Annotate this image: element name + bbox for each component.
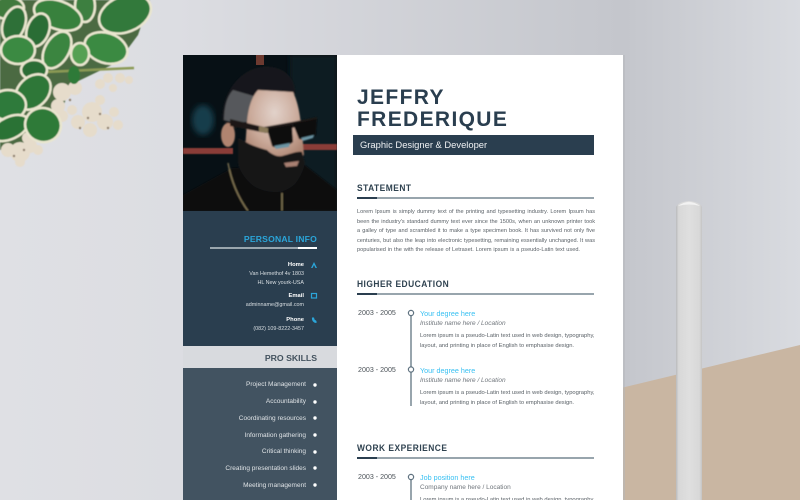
tan paper surface bbox=[600, 345, 800, 500]
statement text: Lorem Ipsum is simply dummy text of the printing and typesetting industry. Lorem Ipsum has bbox=[357, 209, 595, 215]
contact: home: HL New yourk-USA bbox=[257, 280, 304, 286]
name: JEFFRY bbox=[357, 86, 445, 109]
contact: email: Email bbox=[289, 293, 304, 299]
resume paper bbox=[183, 55, 623, 500]
education item 1: Lorem ipsum is a pseudo-Latin text used in web design, typography, bbox=[420, 332, 595, 338]
job title: Graphic Designer & Developer bbox=[360, 139, 487, 150]
skills list: Project Management bbox=[246, 381, 306, 388]
work item bbox=[358, 474, 595, 500]
contact: home: Home bbox=[288, 262, 304, 268]
contact: phone: (082) 109-8222-3457 bbox=[253, 326, 304, 332]
skills list: Critical thinking bbox=[262, 448, 306, 455]
education item 2: Institute name here / Location bbox=[420, 377, 506, 384]
beard bbox=[238, 138, 305, 192]
portrait photo bbox=[183, 55, 337, 211]
contact: email bbox=[246, 293, 304, 308]
plant bbox=[0, 0, 157, 167]
pro skills band bbox=[183, 346, 337, 368]
skills list: Creating presentation slides bbox=[225, 464, 306, 472]
heading: personal info: PERSONAL INFO bbox=[244, 234, 317, 244]
heading: work experience: WORK EXPERIENCE bbox=[357, 443, 447, 454]
education item 2: layout, and printing in place of English to emphasise design. bbox=[420, 400, 574, 406]
heading: pro skills: PRO SKILLS bbox=[265, 352, 317, 362]
leaves bbox=[0, 0, 157, 147]
statement text: popularised in the with the release of Letraset. Lorem ipsum is a pseudo-Latin text used. bbox=[357, 247, 580, 253]
skills list bbox=[225, 381, 317, 488]
personal info panel bbox=[183, 211, 337, 346]
flower clusters bbox=[1, 73, 133, 167]
education rule bbox=[357, 293, 594, 295]
ear bbox=[221, 123, 235, 147]
education item 2: Your degree here bbox=[420, 366, 475, 375]
statement text: a galley of type and scrambled it to make a type specimen book. It has survived not only five bbox=[357, 228, 595, 234]
contact: home bbox=[249, 262, 304, 286]
header band bbox=[353, 135, 594, 155]
education item 2 bbox=[358, 366, 595, 406]
statement text: centuries, but also the leap into electronic typesetting, remaining essentially unchanged. It was bbox=[357, 238, 595, 244]
education item 1: 2003 - 2005 bbox=[358, 309, 396, 317]
pencil bbox=[676, 201, 702, 500]
heading: higher education: HIGHER EDUCATION bbox=[357, 279, 449, 290]
contact: home: Van Hemethof 4v 1803 bbox=[249, 271, 304, 277]
shoulders bbox=[183, 165, 337, 211]
skills list: Information gathering bbox=[245, 432, 306, 438]
hair bbox=[222, 67, 295, 128]
skills list: Coordinating resources bbox=[239, 414, 306, 422]
skills list: Accountability bbox=[266, 398, 306, 405]
name: FREDERIQUE bbox=[357, 108, 508, 130]
education item 1: layout, and printing in place of English to emphasise design. bbox=[420, 342, 574, 348]
work item: Company name here / Location bbox=[420, 484, 511, 491]
statement rule bbox=[357, 197, 594, 199]
work rule bbox=[357, 457, 594, 459]
skills panel bbox=[183, 368, 337, 500]
contact: phone bbox=[253, 317, 304, 332]
education item 1: Institute name here / Location bbox=[420, 320, 506, 327]
skills list: Meeting management bbox=[243, 482, 306, 488]
contact: phone: Phone bbox=[286, 317, 304, 323]
personal info rule bbox=[210, 247, 317, 249]
statement text bbox=[357, 209, 595, 253]
side fade bbox=[224, 90, 257, 122]
name bbox=[357, 86, 508, 130]
education item 2: 2003 - 2005 bbox=[358, 366, 396, 374]
contact: email: adminname@gmail.com bbox=[246, 302, 304, 308]
heading: statement: STATEMENT bbox=[357, 183, 412, 194]
education item 1 bbox=[358, 309, 595, 348]
education item 2: Lorem ipsum is a pseudo-Latin text used in web design, typography, bbox=[420, 390, 595, 396]
sunglasses bbox=[230, 117, 317, 133]
face bbox=[245, 90, 304, 165]
statement text: been the industry's standard dummy text ever since the 1500s, when an unknown printer took bbox=[357, 219, 595, 225]
education item 1: Your degree here bbox=[420, 309, 475, 318]
necklace bbox=[228, 163, 248, 211]
